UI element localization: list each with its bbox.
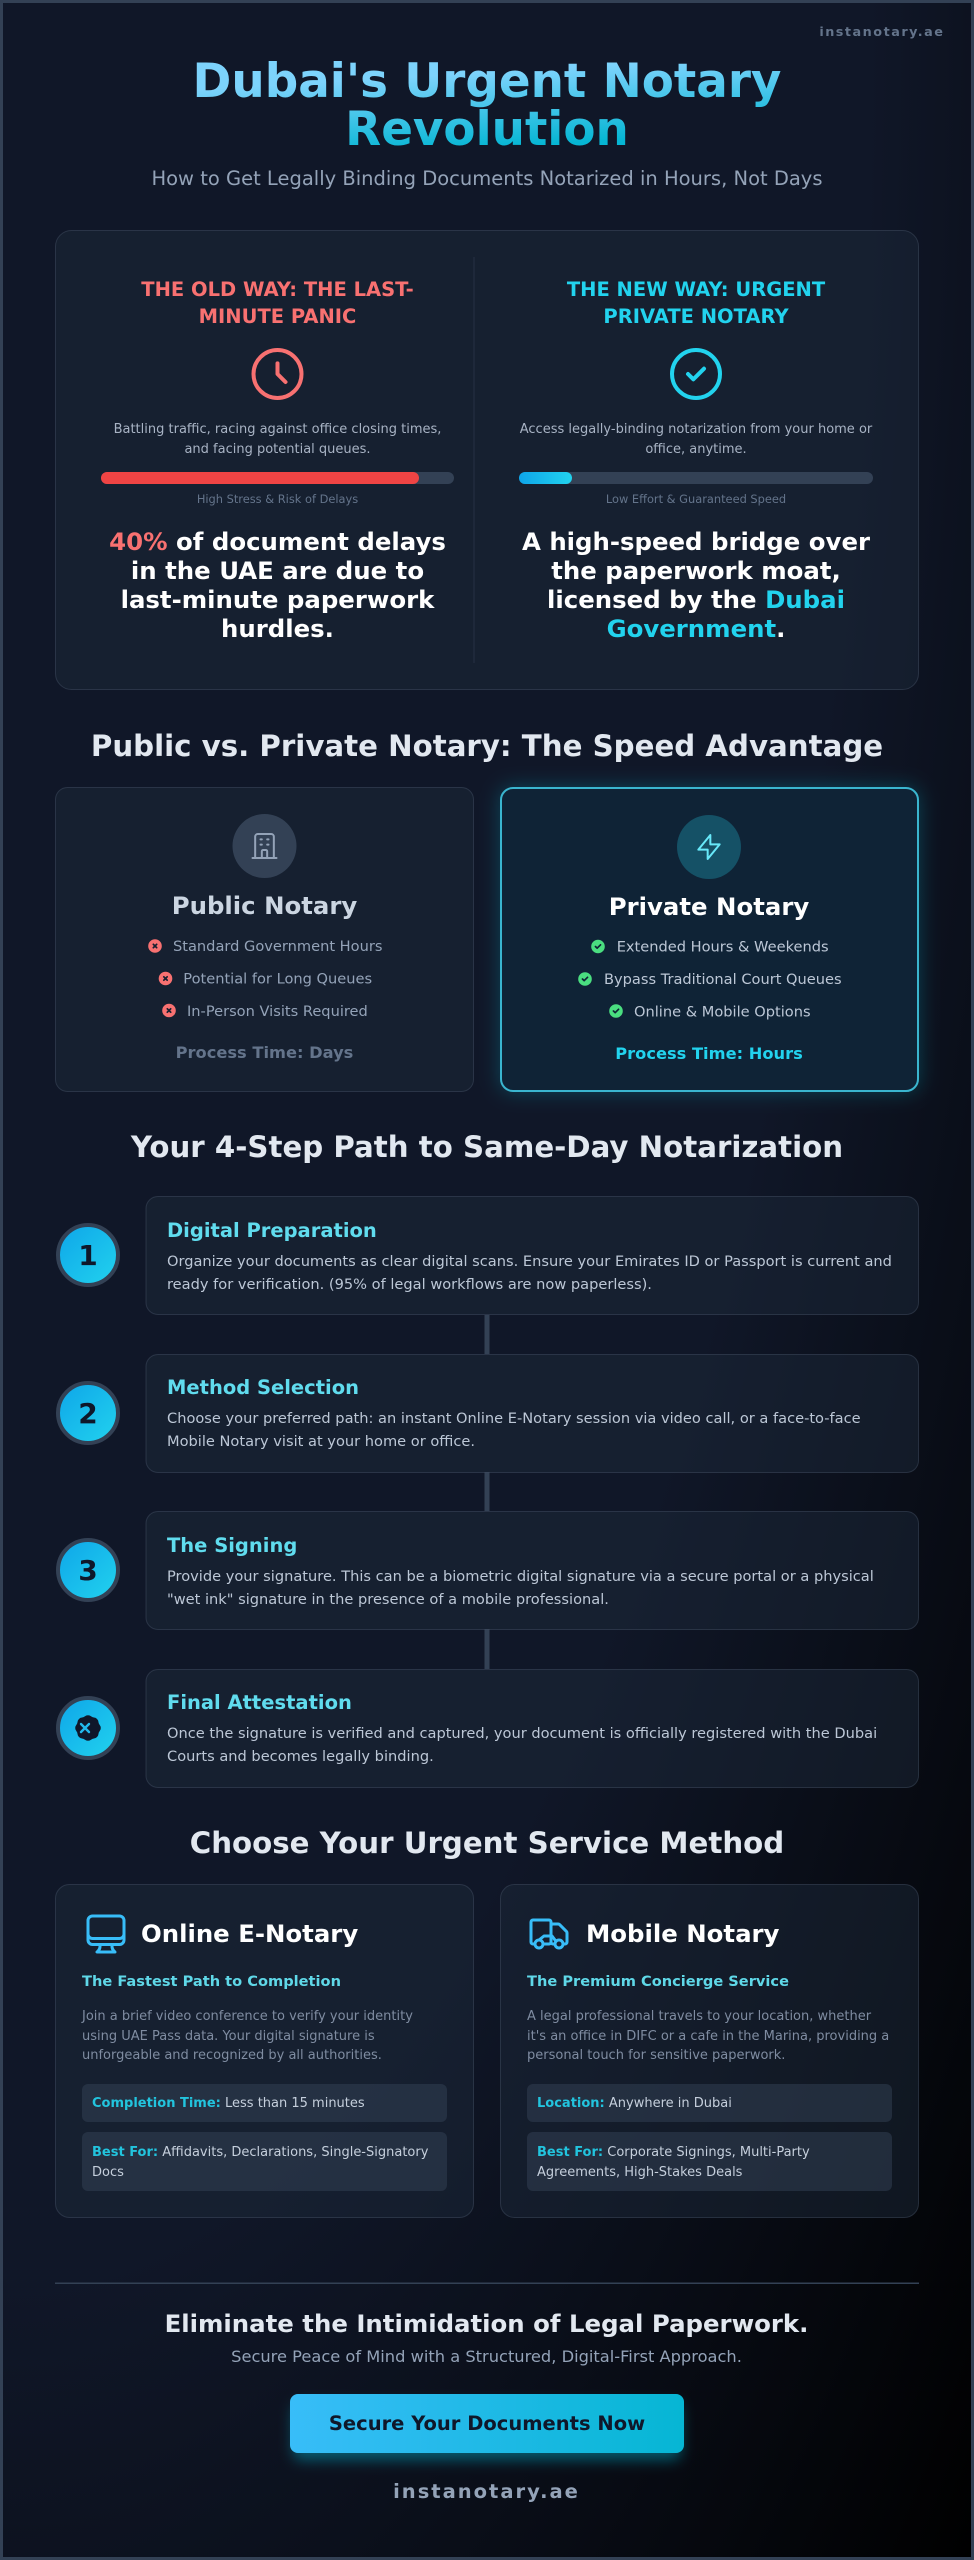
statistic: 40 percent: 40% of document delays bbox=[109, 527, 446, 556]
step 1 number badge: 1 bbox=[78, 1239, 98, 1272]
mobile notary tagline: The Premium Concierge Service bbox=[527, 1973, 789, 1990]
completion time box: Completion Time: Less than 15 minutes bbox=[92, 2096, 365, 2111]
step 2 bbox=[58, 1354, 918, 1472]
public notary name: Public Notary bbox=[172, 891, 357, 920]
heading: old way: THE OLD WAY: THE LAST- bbox=[141, 278, 414, 301]
heading: service method: Choose Your Urgent Service Method bbox=[190, 1826, 784, 1860]
step 4 card: Courts and becomes legally binding. bbox=[167, 1748, 434, 1765]
panel: public notary bbox=[56, 788, 474, 1092]
old way description: Battling traffic, racing against office closing times, bbox=[114, 422, 441, 437]
mobile notary description: it's an office in DIFC or a cafe in the Marina, providing a bbox=[527, 2029, 889, 2044]
icon: check circle bbox=[670, 348, 722, 400]
bar caption: Low Effort & Guaranteed Speed bbox=[606, 492, 786, 506]
step 1 card: Organize your documents as clear digital scans. Ensure your Emirates ID or Passport is current and bbox=[167, 1253, 892, 1270]
old way description: and facing potential queues. bbox=[184, 442, 371, 457]
online e-notary description bbox=[81, 2009, 413, 2063]
private notary benefits bbox=[578, 938, 842, 1020]
effort bar bbox=[519, 472, 873, 484]
call to action button: Secure Your Documents Now bbox=[329, 2412, 645, 2435]
panel: mobile notary bbox=[500, 1884, 918, 2218]
public notary drawbacks: Standard Government Hours bbox=[173, 938, 382, 955]
step 1 card: Digital Preparation bbox=[167, 1219, 377, 1242]
statistic: 40 percent: last-minute paperwork bbox=[121, 585, 435, 614]
step 3 card: Provide your signature. This can be a biometric digital signature via a secure portal or a physical bbox=[167, 1568, 874, 1585]
icon: building bbox=[232, 814, 296, 878]
statement: high-speed bridge: A high-speed bridge over bbox=[522, 527, 870, 556]
step 2 card: Choose your preferred path: an instant Online E-Notary session via video call, or a face-to-face bbox=[167, 1410, 861, 1427]
heading: new way bbox=[567, 278, 826, 328]
title bbox=[193, 55, 781, 157]
location box: Location: Anywhere in Dubai bbox=[537, 2096, 732, 2111]
location box bbox=[527, 2084, 892, 2122]
icon: desktop computer bbox=[86, 1914, 126, 1954]
step 3 bbox=[58, 1512, 918, 1630]
connector: step 3 to 4 bbox=[484, 1629, 490, 1669]
subtitle: How to Get Legally Binding Documents Notarized in Hours, Not Days bbox=[151, 167, 823, 190]
new way description: office, anytime. bbox=[645, 442, 747, 457]
heading: old way bbox=[141, 278, 414, 328]
connector: step 1 to 2 bbox=[484, 1315, 490, 1354]
step 3 number badge: 3 bbox=[78, 1554, 98, 1587]
step 4 card: Final Attestation bbox=[167, 1691, 352, 1714]
best for box: Best For: Corporate Signings, Multi-Party bbox=[537, 2145, 810, 2160]
title: Revolution bbox=[345, 103, 629, 157]
stress bar bbox=[101, 472, 454, 484]
new way description bbox=[520, 422, 873, 457]
step 4 bbox=[58, 1670, 918, 1788]
new way description: Access legally-binding notarization from your home or bbox=[520, 422, 873, 437]
step 2 number badge: 2 bbox=[78, 1397, 98, 1430]
step 2 card: Mobile Notary visit at your home or office. bbox=[167, 1433, 475, 1450]
old way description bbox=[114, 422, 441, 457]
statement: high-speed bridge: licensed by the Dubai bbox=[547, 585, 845, 614]
best for box: Agreements, High-Stakes Deals bbox=[537, 2165, 743, 2180]
step 2 number badge bbox=[58, 1383, 118, 1443]
online e-notary tagline: The Fastest Path to Completion bbox=[82, 1973, 341, 1990]
heading: speed advantage: Public vs. Private Notary: The Speed Advantage bbox=[91, 729, 883, 763]
private notary benefits: Online & Mobile Options bbox=[634, 1004, 811, 1020]
statement: high-speed bridge bbox=[522, 527, 870, 643]
public notary drawbacks: In-Person Visits Required bbox=[187, 1003, 368, 1020]
step 1 card bbox=[146, 1196, 918, 1314]
footer subheading: Secure Peace of Mind with a Structured, Digital-First Approach. bbox=[231, 2347, 742, 2366]
public notary drawbacks bbox=[148, 938, 382, 1020]
panel: online e-notary bbox=[56, 1884, 474, 2218]
best for box: Best For: Affidavits, Declarations, Single-Signatory bbox=[92, 2145, 429, 2160]
old way column bbox=[101, 278, 454, 643]
online e-notary description: Join a brief video conference to verify your identity bbox=[81, 2009, 413, 2024]
online e-notary description: unforgeable and recognized by all authorities. bbox=[82, 2048, 382, 2063]
best for box bbox=[82, 2132, 447, 2191]
private notary name: Private Notary bbox=[609, 892, 809, 921]
mobile notary name: Mobile Notary bbox=[586, 1919, 780, 1948]
icon: lightning bolt bbox=[677, 815, 741, 879]
step 2 card: Method Selection bbox=[167, 1376, 359, 1399]
best for box: Docs bbox=[92, 2165, 124, 2180]
panel: old way vs new way bbox=[56, 230, 918, 690]
heading: new way: THE NEW WAY: URGENT bbox=[567, 278, 826, 301]
mobile notary description: personal touch for sensitive paperwork. bbox=[527, 2048, 785, 2063]
step 4 badge icon bbox=[58, 1698, 118, 1758]
online e-notary description: using UAE Pass data. Your digital signature is bbox=[82, 2029, 375, 2044]
site label top right: instanotary.ae bbox=[819, 25, 944, 40]
private notary benefits: Extended Hours & Weekends bbox=[617, 938, 829, 956]
heading: old way: MINUTE PANIC bbox=[199, 305, 356, 328]
step 2 card bbox=[146, 1354, 918, 1472]
connector: step 2 to 3 bbox=[484, 1472, 490, 1511]
mobile notary description bbox=[527, 2009, 889, 2063]
statement: high-speed bridge: Government. bbox=[607, 614, 785, 643]
footer heading: Eliminate the Intimidation of Legal Paperwork. bbox=[165, 2309, 808, 2338]
public notary drawbacks: Potential for Long Queues bbox=[183, 970, 372, 988]
step 4 card bbox=[146, 1670, 918, 1788]
new way column bbox=[519, 278, 873, 643]
online e-notary name: Online E-Notary bbox=[141, 1919, 358, 1948]
step 4 card: Once the signature is verified and captured, your document is officially registered with the Dubai bbox=[167, 1725, 877, 1742]
heading: four-step path: Your 4-Step Path to Same-Day Notarization bbox=[130, 1130, 843, 1164]
step 3 card: The Signing bbox=[167, 1534, 297, 1557]
footer brand: instanotary.ae bbox=[393, 2480, 580, 2503]
step 1 card: ready for verification. (95% of legal workflows are now paperless). bbox=[167, 1276, 652, 1293]
statistic: 40 percent: hurdles. bbox=[221, 614, 334, 643]
statistic: 40 percent bbox=[109, 527, 446, 643]
heading: new way: PRIVATE NOTARY bbox=[603, 305, 789, 328]
panel: private notary bbox=[500, 787, 919, 1092]
public process time: Process Time: Days bbox=[176, 1043, 353, 1062]
icon: truck bbox=[530, 1918, 568, 1950]
mobile notary description: A legal professional travels to your location, whether bbox=[527, 2009, 872, 2024]
statistic: 40 percent: in the UAE are due to bbox=[131, 556, 424, 585]
step 3 card: "wet ink" signature in the presence of a mobile professional. bbox=[167, 1591, 609, 1608]
private notary benefits: Bypass Traditional Court Queues bbox=[604, 971, 842, 988]
step 1 number badge bbox=[58, 1225, 118, 1285]
private process time: Process Time: Hours bbox=[615, 1044, 803, 1063]
title: Dubai's Urgent Notary bbox=[193, 55, 781, 109]
best for box bbox=[527, 2132, 892, 2191]
step 1 bbox=[58, 1196, 918, 1314]
statement: high-speed bridge: the paperwork moat, bbox=[551, 556, 841, 585]
step 3 number badge bbox=[58, 1540, 118, 1600]
bar caption: High Stress & Risk of Delays bbox=[197, 492, 358, 506]
call to action button bbox=[290, 2394, 684, 2460]
icon: clock bbox=[252, 348, 304, 400]
completion time box bbox=[82, 2084, 447, 2122]
step 3 card bbox=[146, 1512, 918, 1630]
